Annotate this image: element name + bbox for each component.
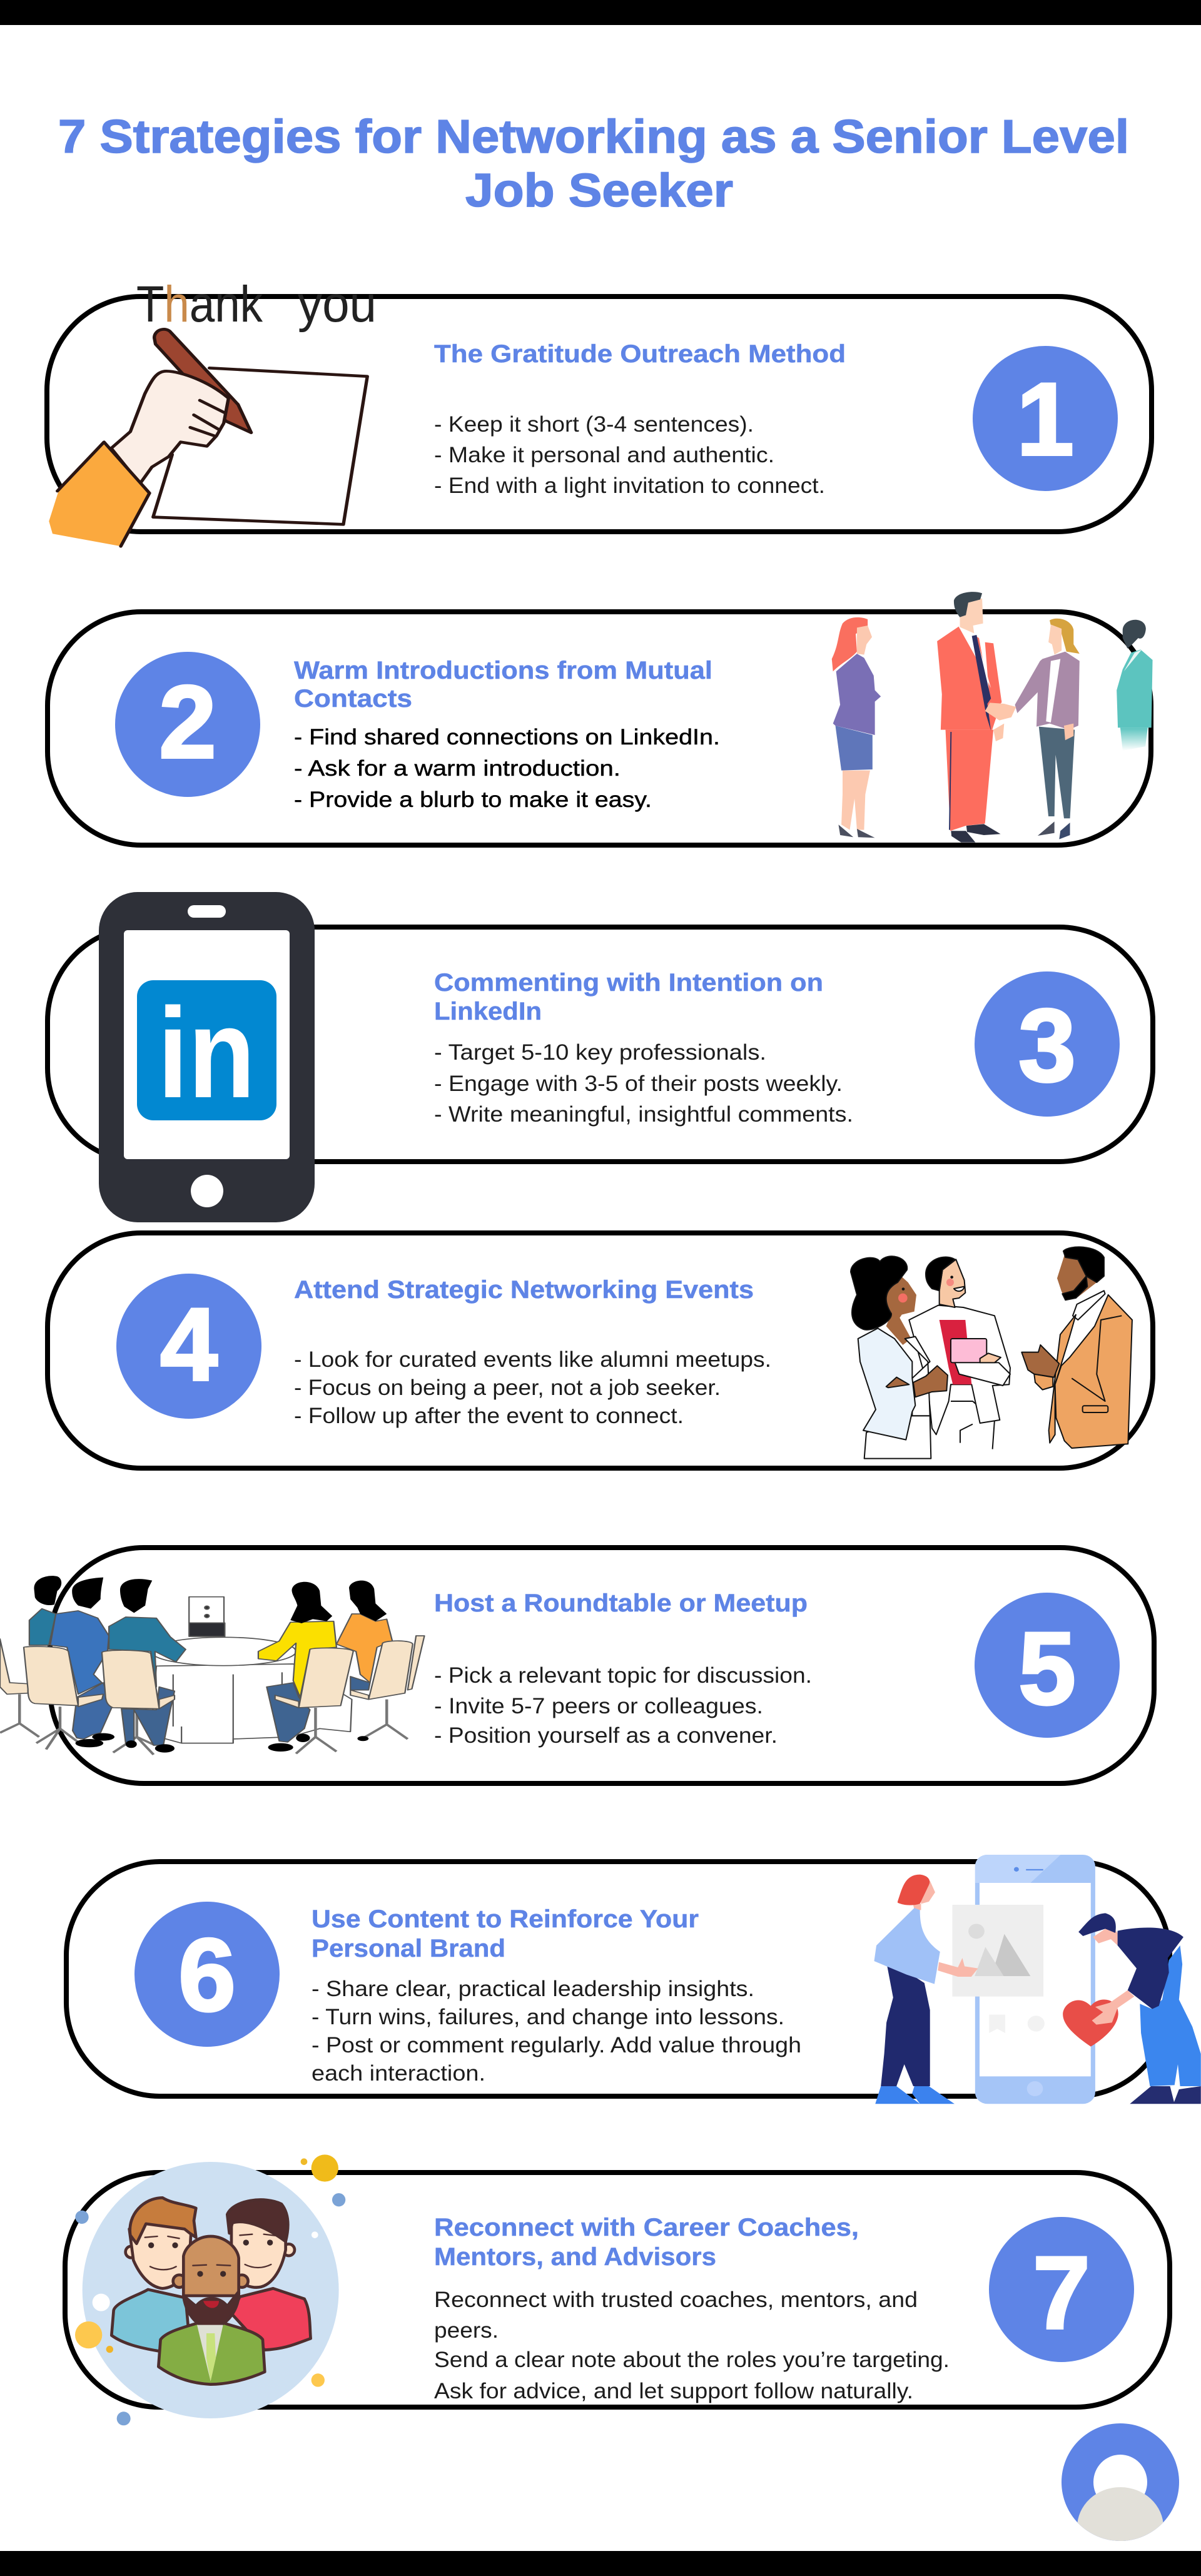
heading 7	[434, 2214, 859, 2271]
number badge 1	[973, 346, 1118, 491]
panel: strategy 2	[48, 592, 1153, 845]
number badge 7	[989, 2217, 1134, 2362]
body 4: - Look for curated events like alumni meetups.	[294, 1347, 771, 1372]
number badge 4	[116, 1274, 261, 1419]
heading 6: Use Content to Reinforce Your	[312, 1905, 699, 1933]
illustration: group of three men in circle	[75, 2154, 345, 2425]
body 3: - Target 5-10 key professionals.	[434, 1040, 766, 1065]
heading 2	[294, 657, 712, 712]
avatar icon	[1062, 2423, 1179, 2541]
body 7: Reconnect with trusted coaches, mentors, and	[434, 2288, 918, 2312]
card outline 7	[65, 2173, 1170, 2407]
body 7: Ask for advice, and let support follow naturally.	[434, 2379, 913, 2403]
body 2: - Ask for a warm introduction.	[294, 756, 621, 781]
number badge 6: 6	[178, 1917, 236, 2032]
body 5: - Position yourself as a convener.	[434, 1723, 778, 1748]
body 4: - Focus on being a peer, not a job seeker.	[294, 1376, 721, 1400]
number badge 2	[115, 652, 260, 797]
body 7	[434, 2288, 950, 2403]
panel: strategy 3	[48, 892, 1153, 1222]
body 7: peers.	[434, 2318, 499, 2343]
body 2: - Find shared connections on LinkedIn.	[294, 725, 720, 749]
heading 3: LinkedIn	[434, 998, 542, 1025]
panel: strategy 7	[65, 2154, 1170, 2425]
title	[58, 110, 1129, 216]
illustration: business people handshake	[832, 592, 1153, 843]
body 4	[294, 1347, 771, 1428]
heading 4: Attend Strategic Networking Events	[294, 1276, 754, 1304]
heading 1: The Gratitude Outreach Method	[434, 340, 846, 368]
top black bar	[0, 0, 1201, 25]
number badge 5	[975, 1593, 1120, 1738]
number badge 7: 7	[1033, 2235, 1090, 2350]
number badge 3	[975, 971, 1120, 1117]
body 6: - Post or comment regularly. Add value through	[312, 2033, 801, 2057]
body 3: - Write meaningful, insightful comments.	[434, 1102, 853, 1127]
card outline 1	[47, 297, 1152, 532]
heading 2: Contacts	[294, 685, 412, 712]
body 6: each interaction.	[312, 2061, 485, 2086]
heading 7: Mentors, and Advisors	[434, 2243, 716, 2271]
card outline 2	[48, 612, 1151, 845]
number badge 2: 2	[159, 664, 216, 779]
illustration: roundtable meeting	[0, 1576, 425, 1755]
body 1: - Make it personal and authentic.	[434, 443, 774, 467]
illustration: three professionals talking	[851, 1247, 1132, 1459]
body 5	[434, 1663, 812, 1748]
title: Job Seeker	[465, 164, 733, 216]
heading 7: Reconnect with Career Coaches,	[434, 2214, 859, 2241]
heading 2: Warm Introductions from Mutual	[294, 657, 712, 684]
panel: strategy 1	[47, 276, 1152, 546]
body 5: - Invite 5-7 peers or colleagues.	[434, 1694, 763, 1718]
icon: hand writing thank you note: you	[298, 276, 377, 333]
body 1	[434, 412, 825, 498]
number badge 3: 3	[1018, 988, 1076, 1103]
body 3: - Engage with 3-5 of their posts weekly.	[434, 1072, 843, 1096]
number badge 1: 1	[1016, 362, 1074, 477]
body 2: - Provide a blurb to make it easy.	[294, 788, 652, 812]
body 7: Send a clear note about the roles you’re targeting.	[434, 2348, 950, 2372]
card outline 4	[48, 1233, 1153, 1468]
heading 6: Personal Brand	[312, 1935, 505, 1962]
number badge 4: 4	[160, 1287, 218, 1402]
icon: phone with LinkedIn logo: in	[158, 981, 255, 1125]
body 1: - Keep it short (3-4 sentences).	[434, 412, 754, 437]
card outline 3	[48, 927, 1153, 1162]
icon: phone with LinkedIn logo	[99, 892, 315, 1222]
heading 5: Host a Roundtable or Meetup	[434, 1590, 808, 1617]
body 5: - Pick a relevant topic for discussion.	[434, 1663, 812, 1688]
illustration: people with phone and heart	[874, 1855, 1201, 2104]
number badge 5: 5	[1018, 1611, 1076, 1726]
bottom black bar	[0, 2551, 1201, 2576]
body 1: - End with a light invitation to connect.	[434, 474, 825, 498]
heading 6	[312, 1905, 699, 1962]
number badge 6	[134, 1902, 280, 2047]
panel: strategy 6	[66, 1855, 1201, 2104]
title: 7 Strategies for Networking as a Senior Level	[58, 110, 1129, 163]
heading 3: Commenting with Intention on	[434, 969, 823, 996]
body 6	[312, 1977, 801, 2086]
body 6: - Share clear, practical leadership insights.	[312, 1977, 754, 2001]
panel: strategy 4	[48, 1233, 1153, 1468]
body 3	[434, 1040, 853, 1127]
body 6: - Turn wins, failures, and change into lessons.	[312, 2005, 784, 2029]
icon: hand writing thank you note: Thank	[136, 276, 263, 333]
body 4: - Follow up after the event to connect.	[294, 1404, 684, 1428]
card outline 5	[50, 1548, 1154, 1783]
icon: hand writing thank you note	[49, 276, 377, 546]
card outline 6	[66, 1862, 1170, 2096]
body 2	[294, 725, 720, 812]
heading 3	[434, 969, 823, 1025]
panel: strategy 5	[0, 1548, 1154, 1783]
